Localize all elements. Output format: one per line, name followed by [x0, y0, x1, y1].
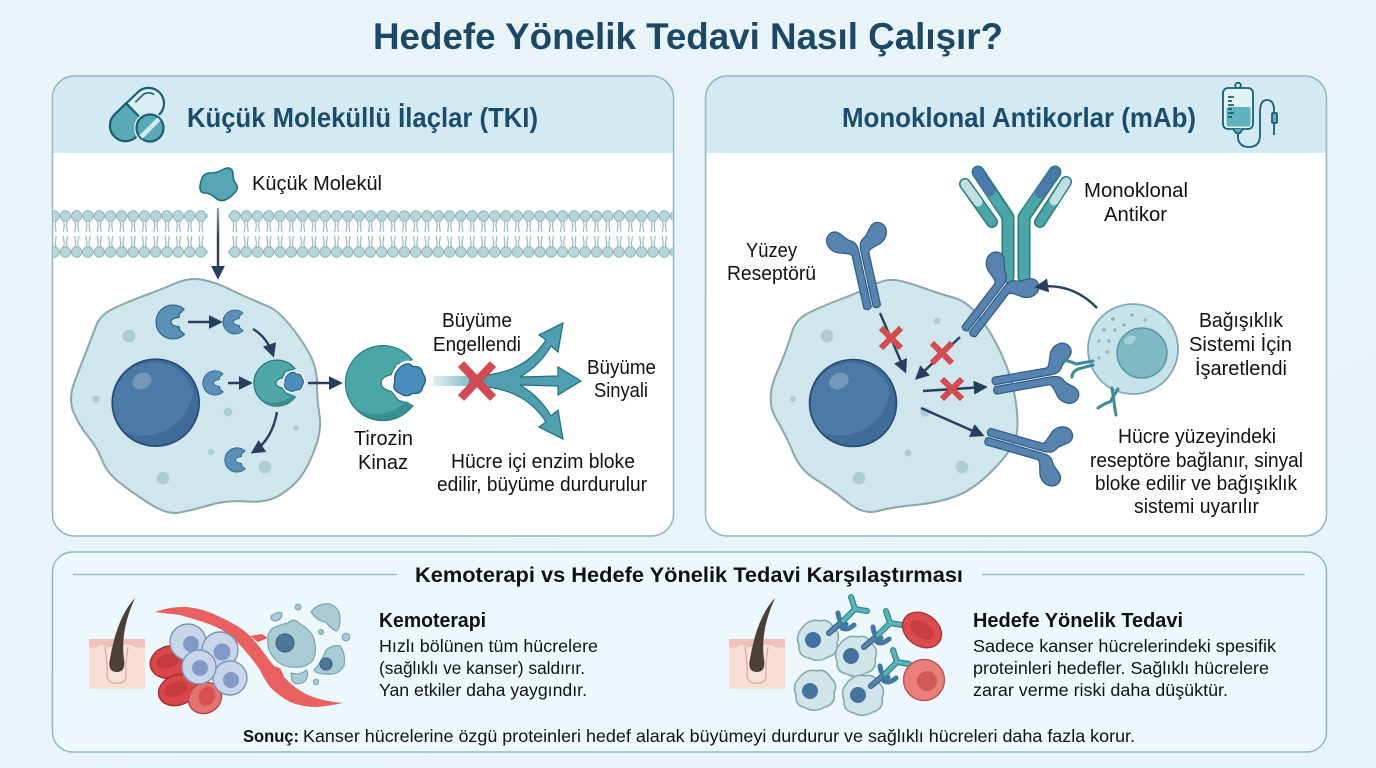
- receptor bound to immune cell: [988, 342, 1080, 416]
- nucleus: [112, 359, 199, 446]
- white blood cells: [170, 624, 247, 695]
- label: growth signal: [587, 356, 656, 402]
- caption: mAb mechanism: sistemi uyarılır: [1134, 495, 1259, 518]
- arrows between enzymes: [188, 322, 340, 452]
- surface receptor: [825, 221, 902, 315]
- label: marked for immune system: İşaretlendi: [1195, 357, 1287, 380]
- heading: comparison: Kemoterapi vs Hedefe Yönelik Tedavi Karşılaştırması: [415, 563, 963, 587]
- immune cell receptors: [1063, 360, 1118, 415]
- cell membrane: [54, 210, 672, 258]
- label: monoclonal antibody: [1084, 179, 1188, 226]
- conclusion: Kanser hücrelerine özgü proteinleri hedef alarak büyümeyi durdurur ve sağlıklı hücreleri daha fazla korur.: [303, 726, 1135, 746]
- icon: small molecule: [200, 168, 237, 201]
- healthy red blood cells: [896, 605, 948, 700]
- label: growth blocked: Engellendi: [433, 333, 521, 356]
- receptor bound to antibody: [944, 248, 1042, 352]
- conclusion: Sonuç:: [243, 726, 299, 746]
- lower receptor: [978, 407, 1075, 488]
- caption: mAb mechanism: reseptöre bağlanır, sinyal: [1090, 449, 1303, 472]
- caption: mAb mechanism: [1090, 425, 1303, 518]
- illustration: chemotherapy damage to cells: [147, 604, 350, 719]
- text: chemotherapy: (sağlıklı ve kanser) saldırır.: [379, 658, 585, 678]
- enzymes: [156, 305, 245, 472]
- text: targeted therapy: Sadece kanser hücrelerindeki spesifik: [973, 636, 1276, 656]
- red blood cells: [147, 641, 227, 719]
- caption: TKI mechanism: Hücre içi enzim bloke: [451, 450, 635, 473]
- panel: small molecule drugs (TKI): [52, 76, 674, 536]
- caption: mAb mechanism: bloke edilir ve bağışıklık: [1095, 472, 1298, 495]
- label: small molecule: Küçük Molekül: [252, 172, 382, 195]
- text: targeted therapy: Hedefe Yönelik Tedavi: [973, 610, 1183, 632]
- signal arrows inside cell: [880, 313, 985, 435]
- caption: TKI mechanism: [437, 450, 647, 496]
- title: Hedefe Yönelik Tedavi Nasıl Çalışır?: [373, 16, 1003, 57]
- panel: comparison: [52, 552, 1326, 752]
- label: monoclonal antibody: Monoklonal: [1084, 179, 1188, 202]
- panel: monoclonal antibodies (mAb): [706, 76, 1326, 536]
- heading: small molecule drugs: Küçük Moleküllü İlaçlar (TKI): [187, 102, 538, 133]
- text: chemotherapy: Hızlı bölünen tüm hücrelere: [379, 636, 598, 656]
- arrow: molecule enters cell: [217, 208, 219, 277]
- icon: IV bag: [1223, 83, 1277, 147]
- red cross: growth blocked: [461, 364, 493, 398]
- destroyed cancer cells: [268, 604, 350, 685]
- label: surface receptor: Reseptörü: [727, 262, 816, 285]
- label: growth blocked: Büyüme: [442, 309, 512, 332]
- label: growth signal: Büyüme: [587, 356, 656, 379]
- heading: monoclonal antibodies: Monoklonal Antikorlar (mAb): [842, 102, 1196, 133]
- bound antibodies: [829, 597, 909, 686]
- red crosses: signals blocked: [881, 328, 962, 399]
- icon: pill and capsule: [104, 81, 170, 148]
- immune cell: [1063, 304, 1178, 415]
- illustration: chemotherapy skin and hair: [89, 598, 145, 689]
- nucleus: [810, 360, 896, 446]
- growth signal arrows: [433, 323, 581, 439]
- targeted cancer cells: [795, 620, 883, 715]
- label: marked for immune system: Sistemi İçin: [1189, 333, 1292, 356]
- text: targeted therapy: zarar verme riski daha düşüktür.: [973, 680, 1228, 700]
- label: tyrosine kinase: Kinaz: [358, 451, 408, 474]
- tyrosine kinase with drug: [345, 346, 427, 421]
- illustration: targeted therapy skin and hair: [729, 598, 785, 689]
- cell with enzymes: [71, 279, 340, 513]
- caption: mAb mechanism: Hücre yüzeyindeki: [1118, 425, 1276, 448]
- label: tyrosine kinase: Tirozin: [354, 427, 413, 450]
- label: growth signal: Sinyali: [594, 379, 648, 402]
- text: targeted therapy: [973, 610, 1276, 700]
- label: surface receptor: [727, 239, 816, 285]
- label: marked for immune system: [1189, 309, 1292, 380]
- monoclonal antibody: [965, 172, 1066, 277]
- label: tyrosine kinase: [354, 427, 413, 474]
- text: targeted therapy: proteinleri hedefler. Sağlıklı hücrelere: [973, 658, 1269, 678]
- text: chemotherapy: [379, 610, 598, 700]
- curved arrow: immune cell to antibody: [1037, 286, 1097, 308]
- caption: TKI mechanism: edilir, büyüme durdurulur: [437, 473, 647, 496]
- label: surface receptor: Yüzey: [746, 239, 798, 262]
- label: monoclonal antibody: Antikor: [1104, 203, 1167, 226]
- illustration: targeted therapy cells: [795, 597, 948, 715]
- cancer cell: [771, 280, 1018, 512]
- label: growth blocked: [433, 309, 521, 356]
- text: chemotherapy: Yan etkiler daha yaygındır.: [379, 680, 587, 700]
- label: marked for immune system: Bağışıklık: [1199, 309, 1284, 332]
- active kinase in cell: [254, 360, 304, 406]
- text: chemotherapy: Kemoterapi: [379, 610, 486, 632]
